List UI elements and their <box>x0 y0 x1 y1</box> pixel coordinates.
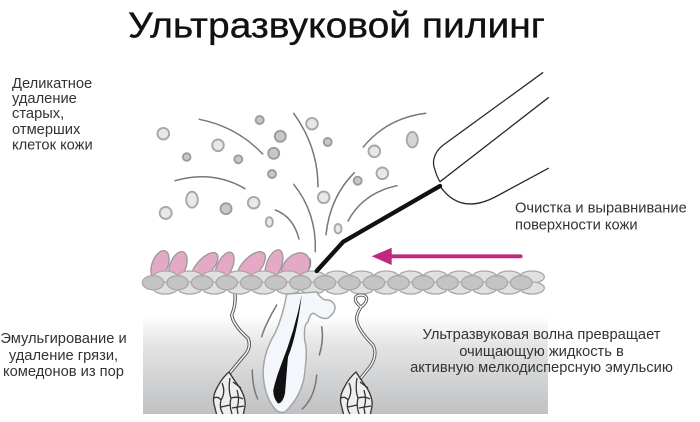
pink dead skin cells <box>150 249 310 276</box>
label: removing dead cells: отмерших <box>12 122 81 138</box>
label: removing dead cells <box>12 76 93 154</box>
probe blade <box>317 186 440 271</box>
label: cleansing and smoothing: Очистка и выравнивание <box>515 200 687 216</box>
label: ultrasonic wave: активную мелкодисперсную эмульсию <box>410 360 673 376</box>
label: ultrasonic wave <box>410 327 673 376</box>
hair shaft <box>273 295 302 404</box>
label: removing dead cells: клеток кожи <box>12 138 93 154</box>
ultrasonic probe <box>317 73 548 271</box>
probe handle <box>434 73 548 204</box>
label: emulsifying dirt: комедонов из пор <box>3 364 124 380</box>
right sweat duct and gland <box>340 295 375 416</box>
direction arrow <box>372 248 521 265</box>
label: cleansing and smoothing: поверхности кожи <box>515 218 638 234</box>
label: removing dead cells: удаление <box>12 91 77 107</box>
label: emulsifying dirt: Эмульгирование и <box>0 331 127 347</box>
title: Ультразвуковой пилинг <box>128 4 545 46</box>
left sweat duct and gland <box>214 294 249 416</box>
label: removing dead cells: старых, <box>12 106 64 122</box>
label: removing dead cells: Деликатное <box>12 76 92 92</box>
follicle motion marks <box>252 305 322 409</box>
skin cell layer <box>142 271 544 294</box>
label: ultrasonic wave: Ультразвуковая волна превращает <box>423 327 661 343</box>
spray trajectory curves <box>175 113 426 272</box>
flying dead skin particles <box>158 116 418 234</box>
lower skin gradient panel <box>143 316 548 414</box>
hair follicle <box>252 292 335 412</box>
label: cleansing and smoothing <box>515 200 687 234</box>
label: emulsifying dirt: удаление грязи, <box>9 348 118 364</box>
label: ultrasonic wave: очищающую жидкость в <box>459 344 624 360</box>
label: emulsifying dirt <box>0 331 127 380</box>
